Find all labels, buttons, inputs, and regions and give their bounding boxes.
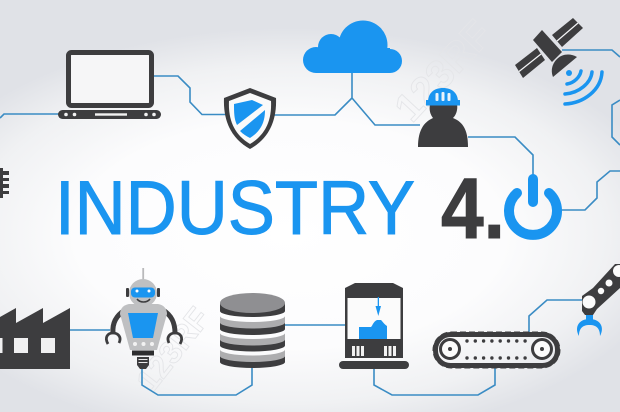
icon: worker with helmet xyxy=(418,88,468,147)
icon: conveyor belt xyxy=(434,333,559,367)
watermarks xyxy=(129,12,500,398)
icon: satellite with signal xyxy=(515,18,602,104)
icon: robot xyxy=(106,268,182,369)
icon: power symbol as zero xyxy=(509,179,557,235)
icon: database xyxy=(220,293,285,368)
icon: shield xyxy=(224,88,276,149)
icon: chip fragment xyxy=(0,168,9,198)
icon: factory xyxy=(0,308,70,369)
title: INDUSTRY: INDUSTRY xyxy=(55,166,415,251)
icon: laptop xyxy=(58,52,161,119)
watermarks: 123RF xyxy=(129,300,217,398)
icon: robotic arm xyxy=(577,264,620,336)
icon: 3D printer xyxy=(339,283,409,369)
title: 4.: 4. xyxy=(441,161,505,257)
watermarks: 123RF xyxy=(386,12,500,130)
icon: cloud xyxy=(303,20,402,73)
